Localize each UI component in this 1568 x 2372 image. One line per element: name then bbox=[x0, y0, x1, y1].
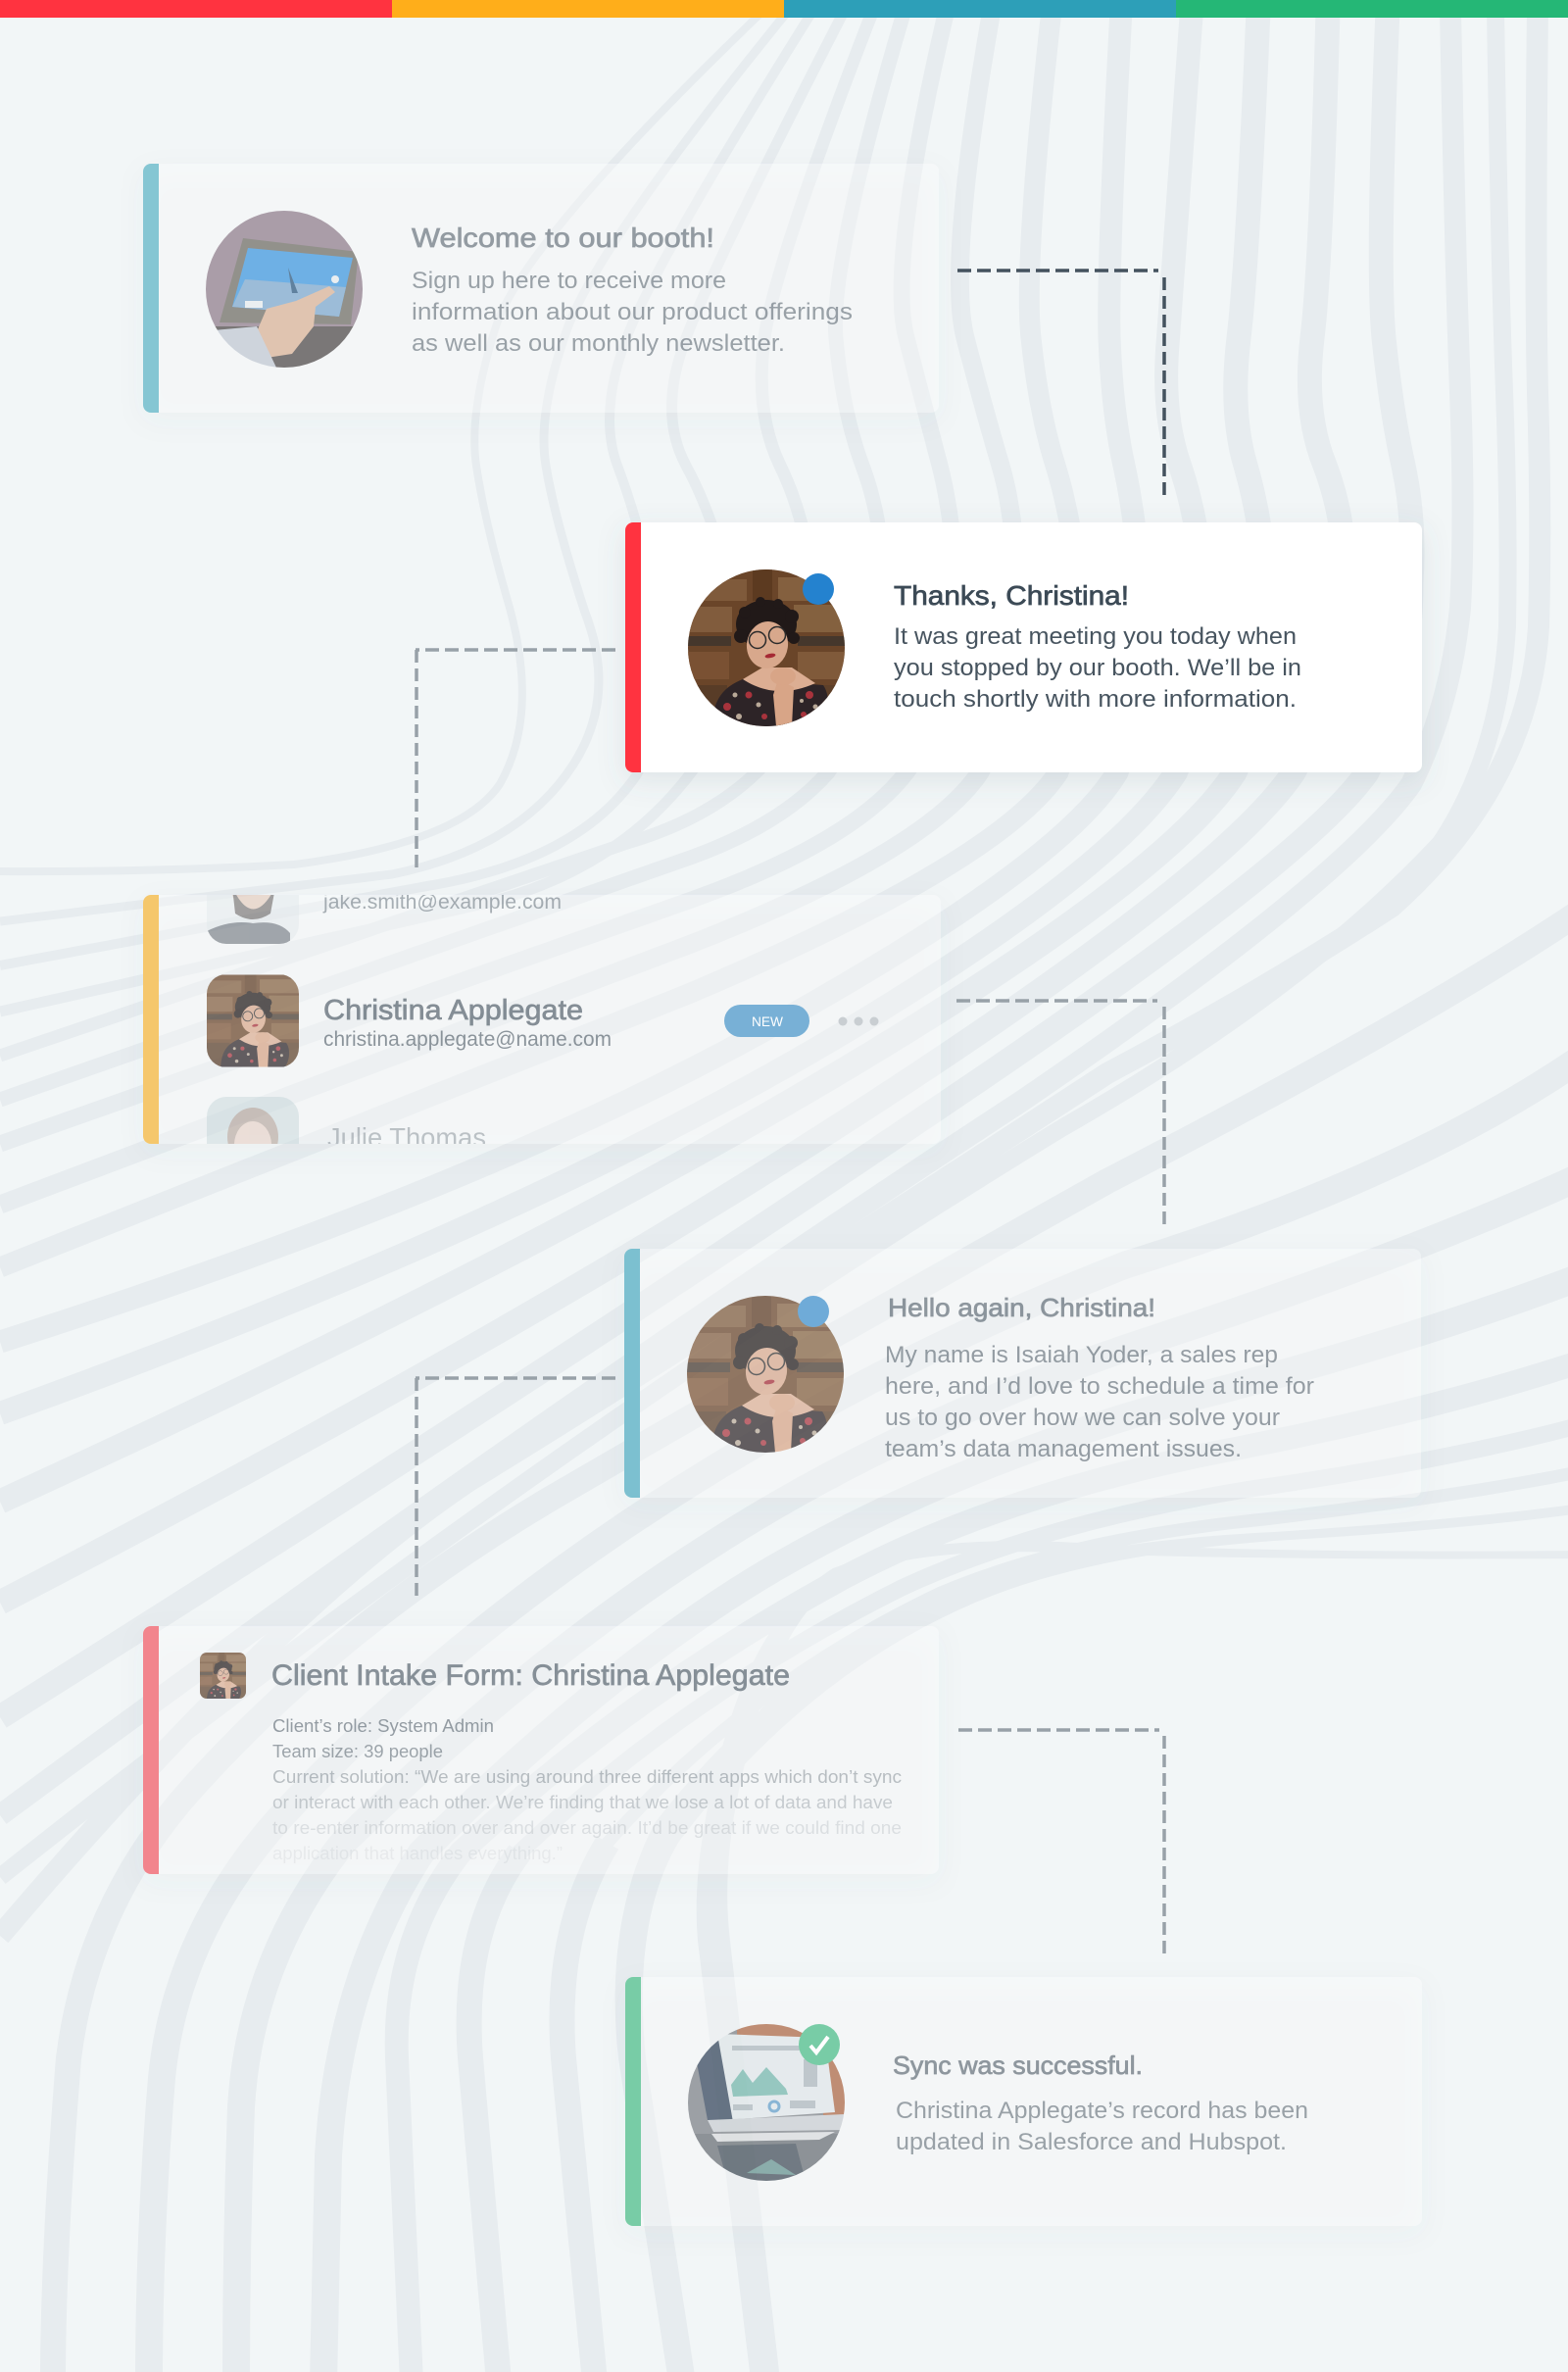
icon: Christina thumbnail bbox=[200, 1653, 246, 1699]
text: hello body: My name is Isaiah Yoder, a sales rep bbox=[885, 1342, 1278, 1368]
icon: laptop photo bbox=[688, 2024, 845, 2181]
heading: thanks: Thanks, Christina! bbox=[894, 580, 1129, 611]
icon: Christina photo bbox=[688, 569, 845, 726]
icon: blue dot bbox=[798, 1296, 829, 1327]
text: thanks body: you stopped by our booth. We’ll be in bbox=[894, 655, 1301, 681]
panel: contact list card bbox=[143, 895, 878, 1144]
heading: welcome: Welcome to our booth! bbox=[412, 222, 714, 253]
panel: client intake form card bbox=[143, 1626, 939, 1874]
text: hello body: here, and I’d love to schedule a time for bbox=[885, 1373, 1314, 1400]
icon: blue notification dot bbox=[803, 573, 834, 605]
connector 3: list to hello bbox=[956, 1001, 1164, 1226]
text: thanks body: touch shortly with more information. bbox=[894, 686, 1297, 713]
icon: more dots bbox=[839, 1017, 878, 1025]
text: contact email: christina.applegate@name.com bbox=[323, 1028, 612, 1051]
text: hello body: us to go over how we can solve your bbox=[885, 1405, 1280, 1431]
connector 4: hello to intake form bbox=[416, 1378, 615, 1596]
panel: hello again card bbox=[624, 1249, 1313, 1498]
text: thanks body bbox=[894, 623, 1301, 713]
icon: tablet photo bbox=[206, 211, 363, 368]
top colour bar bbox=[0, 0, 1568, 18]
text: intake form details: Team size: 39 people bbox=[272, 1741, 443, 1761]
text: welcome body: Sign up here to receive more bbox=[412, 268, 726, 294]
panel: sync success card bbox=[625, 1977, 1307, 2226]
badge: new: NEW bbox=[752, 1013, 784, 1029]
list row: Christina Applegate bbox=[207, 974, 878, 1066]
list row: Jake Smith bbox=[207, 895, 561, 944]
badge: new bbox=[724, 1005, 809, 1037]
connector 2: thanks to list bbox=[416, 650, 615, 868]
text: sync body bbox=[896, 2098, 1308, 2155]
text: intake form details: or interact with each other. We’re finding that we lose a lot of data and have bbox=[272, 1792, 893, 1812]
connector 5: intake form to sync bbox=[958, 1730, 1164, 1955]
text: thanks body: It was great meeting you today when bbox=[894, 623, 1297, 650]
text: contact name: Christina Applegate bbox=[323, 995, 583, 1026]
text: welcome body bbox=[412, 268, 853, 357]
text: intake form details: application that handles everything.” bbox=[272, 1843, 563, 1863]
text: sync body: Christina Applegate’s record has been bbox=[896, 2098, 1308, 2124]
text: welcome body: as well as our monthly newsletter. bbox=[412, 330, 785, 357]
text: hello body bbox=[885, 1342, 1314, 1462]
text: intake form details: Current solution: “We are using around three different apps which don’t sync bbox=[272, 1766, 902, 1787]
heading: hello: Hello again, Christina! bbox=[888, 1293, 1155, 1322]
icon: success check bbox=[799, 2024, 840, 2065]
connector 1: booth to thanks bbox=[957, 271, 1164, 497]
icon: Christina photo bbox=[687, 1296, 844, 1453]
text: intake form details: Client’s role: System Admin bbox=[272, 1715, 494, 1736]
panel: welcome card bbox=[143, 164, 852, 413]
panel: thanks card bbox=[625, 522, 1422, 772]
text: hello body: team’s data management issues. bbox=[885, 1436, 1242, 1462]
list row: Julie Thomas bbox=[207, 1097, 485, 1144]
text: intake form details: to re-enter information over and over again. It’d be great if we could find one bbox=[272, 1817, 902, 1838]
text: intake form details bbox=[272, 1715, 902, 1863]
heading: sync: Sync was successful. bbox=[893, 2051, 1143, 2080]
heading: intake form: Client Intake Form: Christina Applegate bbox=[271, 1659, 790, 1692]
list row: Jake Smith: jake.smith@example.com bbox=[322, 891, 562, 914]
list row: Julie Thomas: Julie Thomas bbox=[327, 1122, 486, 1153]
text: sync body: updated in Salesforce and Hubspot. bbox=[896, 2129, 1287, 2155]
text: welcome body: information about our product offerings bbox=[412, 299, 853, 325]
